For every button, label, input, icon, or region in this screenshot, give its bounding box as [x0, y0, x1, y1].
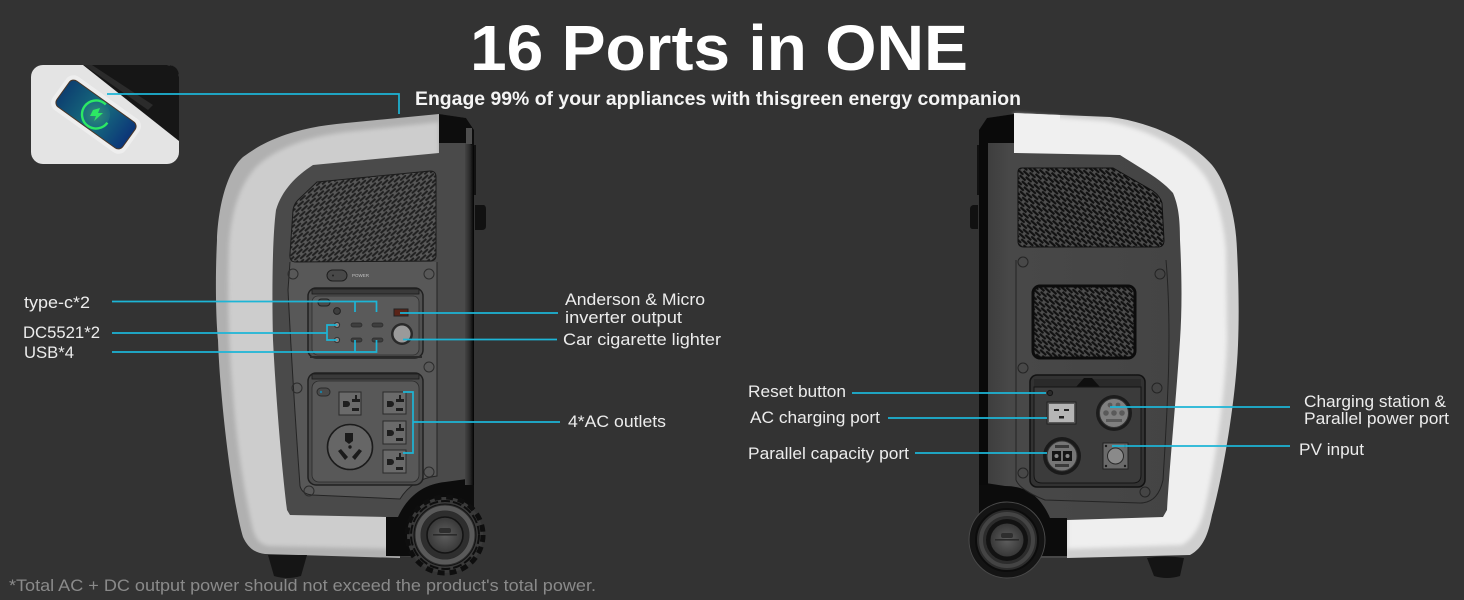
right wheel	[969, 502, 1045, 578]
parallel capacity round port	[1043, 437, 1081, 475]
20A outlets	[339, 392, 406, 473]
footnote: *Total AC + DC output power should not exceed the product's total power.	[9, 576, 596, 595]
inset: wireless charging pad	[31, 65, 179, 164]
icon: phone with charging ring	[47, 72, 145, 157]
left top cap	[439, 114, 474, 146]
left shell	[216, 114, 439, 558]
label: Car cigarette lighter: Car cigarette lighter	[563, 330, 721, 349]
label: Anderson and Micro inverter output: inverter output	[565, 308, 682, 327]
left wheel	[407, 497, 483, 573]
device: right side with input ports	[969, 113, 1239, 578]
left cap highlight	[466, 128, 472, 144]
right shell	[1014, 113, 1239, 558]
device: left side with output ports	[216, 114, 486, 578]
label: type-c*2: type-c*2	[24, 293, 90, 312]
label: 4*AC outlets: 4*AC outlets	[568, 412, 666, 431]
label: PV input: PV input	[1299, 440, 1364, 459]
right lower grille	[1033, 286, 1135, 358]
AC output panel	[308, 373, 423, 485]
label: Anderson and Micro inverter output: Anderson & Micro	[565, 290, 705, 309]
callout lines: right device	[852, 393, 1290, 453]
left plate	[288, 262, 437, 499]
right screws	[1018, 257, 1165, 497]
right body edge	[979, 140, 988, 485]
PV input socket	[1103, 443, 1128, 469]
right black wheel well	[979, 482, 1067, 556]
right shell top edge	[1014, 113, 1060, 154]
30A round outlet	[328, 424, 372, 470]
label: Anderson and Micro inverter output	[565, 290, 705, 327]
left handle knob	[474, 145, 486, 230]
left power button: POWER	[352, 273, 370, 278]
left grille	[290, 171, 436, 262]
subtitle: Engage 99% of your appliances with thisgreen energy companion	[415, 89, 1021, 110]
reset button	[1047, 390, 1053, 396]
label: DC5521*2: DC5521*2	[23, 323, 100, 342]
label: AC charging port: AC charging port	[750, 408, 880, 427]
AC charging socket	[1047, 402, 1076, 424]
callout lines: left device	[107, 94, 560, 453]
title: 16 Ports in ONE	[470, 12, 968, 84]
left foot	[268, 555, 307, 578]
input port well	[1030, 375, 1145, 487]
left body	[272, 114, 474, 558]
label: Parallel capacity port: Parallel capacity port	[748, 444, 909, 463]
label: Reset button: Reset button	[748, 382, 846, 401]
charging station round port	[1096, 395, 1132, 431]
left black wheel well	[386, 478, 474, 556]
left body edge	[465, 140, 474, 485]
right plate outline	[1016, 260, 1169, 503]
right upper grille	[1018, 168, 1164, 247]
DC output panel	[308, 288, 423, 358]
left screws	[288, 269, 434, 496]
right top cap	[979, 114, 1014, 146]
label: Charging station and Parallel power port: Parallel power port	[1304, 409, 1449, 428]
right foot	[1147, 556, 1184, 578]
right body	[979, 114, 1182, 558]
label: Charging station and Parallel power port	[1304, 392, 1449, 428]
left power button	[327, 270, 370, 281]
right handle knob	[970, 145, 979, 229]
label: USB*4: USB*4	[24, 343, 74, 362]
label: Charging station and Parallel power port: Charging station &	[1304, 392, 1447, 411]
